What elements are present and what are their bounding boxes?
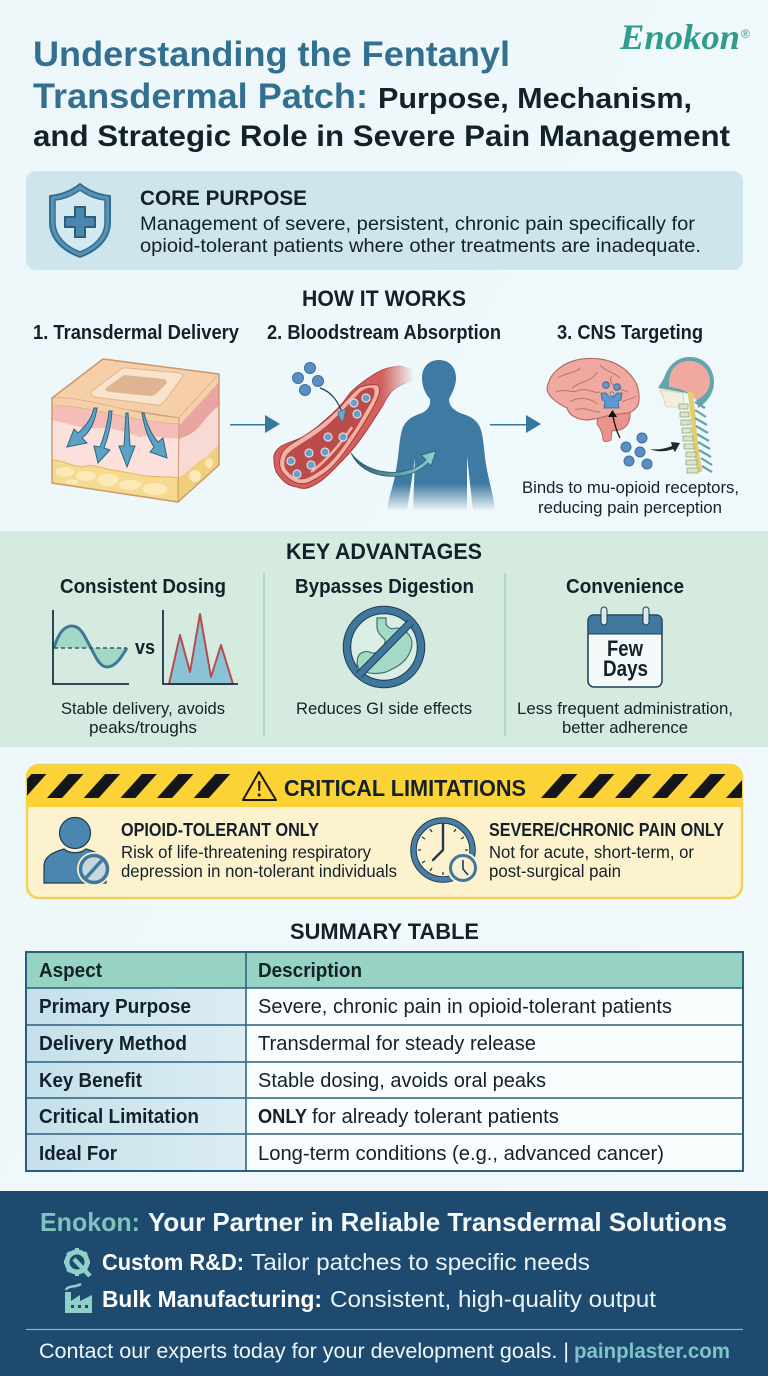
panel: critical limitations	[10, 765, 762, 898]
hazard stripes	[10, 774, 762, 798]
contact line: painplaster.com	[574, 1340, 730, 1363]
title: Purpose, Mechanism,	[378, 83, 692, 115]
caption: CNS	[522, 478, 739, 517]
core purpose text	[140, 187, 701, 257]
table column: aspect: Ideal For	[39, 1143, 117, 1165]
title: and Strategic Role in Severe Pain Management	[33, 120, 730, 153]
column headings: Bypasses Digestion	[295, 576, 474, 598]
manufacturing line: Consistent, high-quality output	[330, 1286, 657, 1312]
logo: Enokon: Enokon	[619, 17, 740, 57]
step labels	[33, 322, 703, 344]
icon: person with prohibition	[44, 818, 111, 886]
column captions	[61, 699, 733, 737]
table column: description: Severe, chronic pain in opioid-tolerant patients	[258, 996, 672, 1018]
chart: steady dosing curve	[53, 610, 129, 684]
limitation 1 text: OPIOID-TOLERANT ONLY	[121, 820, 319, 840]
limitation 1 text	[121, 820, 397, 881]
limitation 2 text	[489, 820, 724, 881]
table column: description: for already tolerant patients	[312, 1106, 559, 1128]
illustration: blood vessel	[274, 366, 420, 488]
step labels: 1. Transdermal Delivery	[33, 322, 240, 344]
panel: core purpose	[26, 171, 743, 270]
core purpose text: opioid-tolerant patients where other treatments are inadequate.	[140, 236, 701, 257]
core purpose text: CORE PURPOSE	[140, 187, 307, 210]
summary table	[26, 952, 743, 1171]
footer panel	[0, 1191, 768, 1376]
illustration: head and spine	[658, 357, 714, 473]
column headings: Consistent Dosing	[60, 576, 226, 598]
drug molecules in vessel	[287, 394, 370, 478]
footer headline: Your Partner in Reliable Transdermal Solutions	[148, 1207, 727, 1237]
limitation 2 text: SEVERE/CHRONIC PAIN ONLY	[489, 820, 724, 840]
column captions: Stable delivery, avoids	[61, 699, 225, 718]
column headings	[60, 576, 684, 598]
icon: shield	[50, 184, 110, 257]
table column: description: ONLY	[258, 1106, 308, 1128]
manufacturing line	[102, 1286, 657, 1312]
contact line: Contact our experts today for your development goals. |	[39, 1340, 569, 1363]
limitation 1 text: depression in non-tolerant individuals	[121, 861, 397, 881]
table column: aspect: Aspect	[39, 960, 102, 982]
limitation 2 text: post-surgical pain	[489, 861, 621, 881]
logo: Enokon: ®	[741, 27, 750, 41]
table column: aspect: Key Benefit	[39, 1070, 142, 1092]
caption: CNS: Binds to mu-opioid receptors,	[522, 478, 739, 497]
R&D line: Custom R&D:	[102, 1249, 244, 1275]
icon: warning triangle	[243, 772, 276, 800]
table column: aspect	[39, 960, 199, 1165]
panel: key advantages	[0, 531, 768, 747]
icon: factory	[65, 1284, 92, 1313]
table column: description: Transdermal for steady release	[258, 1033, 536, 1055]
icon: clock	[414, 820, 479, 884]
illustration: brain	[547, 358, 639, 442]
limitation 2 text: Not for acute, short-term, or	[489, 842, 694, 862]
molecules entering vessel	[292, 362, 346, 422]
title	[33, 35, 730, 153]
caption: CNS: reducing pain perception	[538, 498, 722, 517]
R&D line: Tailor patches to specific needs	[251, 1249, 590, 1275]
step labels: 3. CNS Targeting	[557, 322, 703, 344]
icon: calendar: Days	[603, 656, 648, 681]
column captions: peaks/troughs	[89, 718, 197, 737]
icon: calendar: Few	[607, 636, 644, 661]
icon: no stomach	[347, 610, 421, 684]
illustration: body silhouette	[387, 360, 495, 511]
illustration: skin cube with patch	[52, 359, 219, 502]
patch	[91, 368, 183, 405]
arrow: step 2 to step 3	[490, 415, 541, 433]
R&D line	[102, 1249, 590, 1275]
skin arrows	[67, 408, 167, 467]
heading: how it works: HOW IT WORKS	[302, 286, 466, 311]
title: Understanding the Fentanyl	[33, 35, 510, 74]
receptor	[601, 382, 622, 408]
column captions: Less frequent administration,	[517, 699, 733, 718]
table column: aspect: Primary Purpose	[39, 996, 191, 1018]
footer headline: Enokon:	[40, 1207, 140, 1237]
heading: summary table: SUMMARY TABLE	[290, 919, 479, 944]
table column: description	[258, 960, 672, 1165]
chart: peaks and troughs	[163, 610, 238, 684]
arrow: vessel to body	[351, 451, 436, 476]
table column: aspect: Critical Limitation	[39, 1106, 199, 1128]
icon: calendar	[588, 607, 662, 687]
fat cells	[56, 458, 213, 495]
table column: description: Long-term conditions (e.g., advanced cancer)	[258, 1143, 664, 1165]
arrow: step 1 to step 2	[230, 415, 280, 433]
title: Transdermal Patch:	[33, 77, 368, 116]
manufacturing line: Bulk Manufacturing:	[102, 1286, 322, 1312]
step labels: 2. Bloodstream Absorption	[267, 322, 501, 344]
vs label: vs	[135, 637, 155, 659]
icon: gear and wrench	[64, 1248, 90, 1276]
table column: aspect: Delivery Method	[39, 1033, 187, 1055]
column captions: Reduces GI side effects	[296, 699, 472, 718]
heading: critical limitations: CRITICAL LIMITATIONS	[284, 775, 526, 801]
table column: description: Description	[258, 960, 362, 982]
limitation 1 text: Risk of life-threatening respiratory	[121, 842, 371, 862]
table column: description: Stable dosing, avoids oral peaks	[258, 1070, 546, 1092]
molecules near CNS	[621, 433, 680, 469]
column captions: better adherence	[562, 718, 688, 737]
column headings: Convenience	[566, 576, 684, 598]
core purpose text: Management of severe, persistent, chronic pain specifically for	[140, 214, 696, 235]
heading: key advantages: KEY ADVANTAGES	[286, 539, 482, 564]
